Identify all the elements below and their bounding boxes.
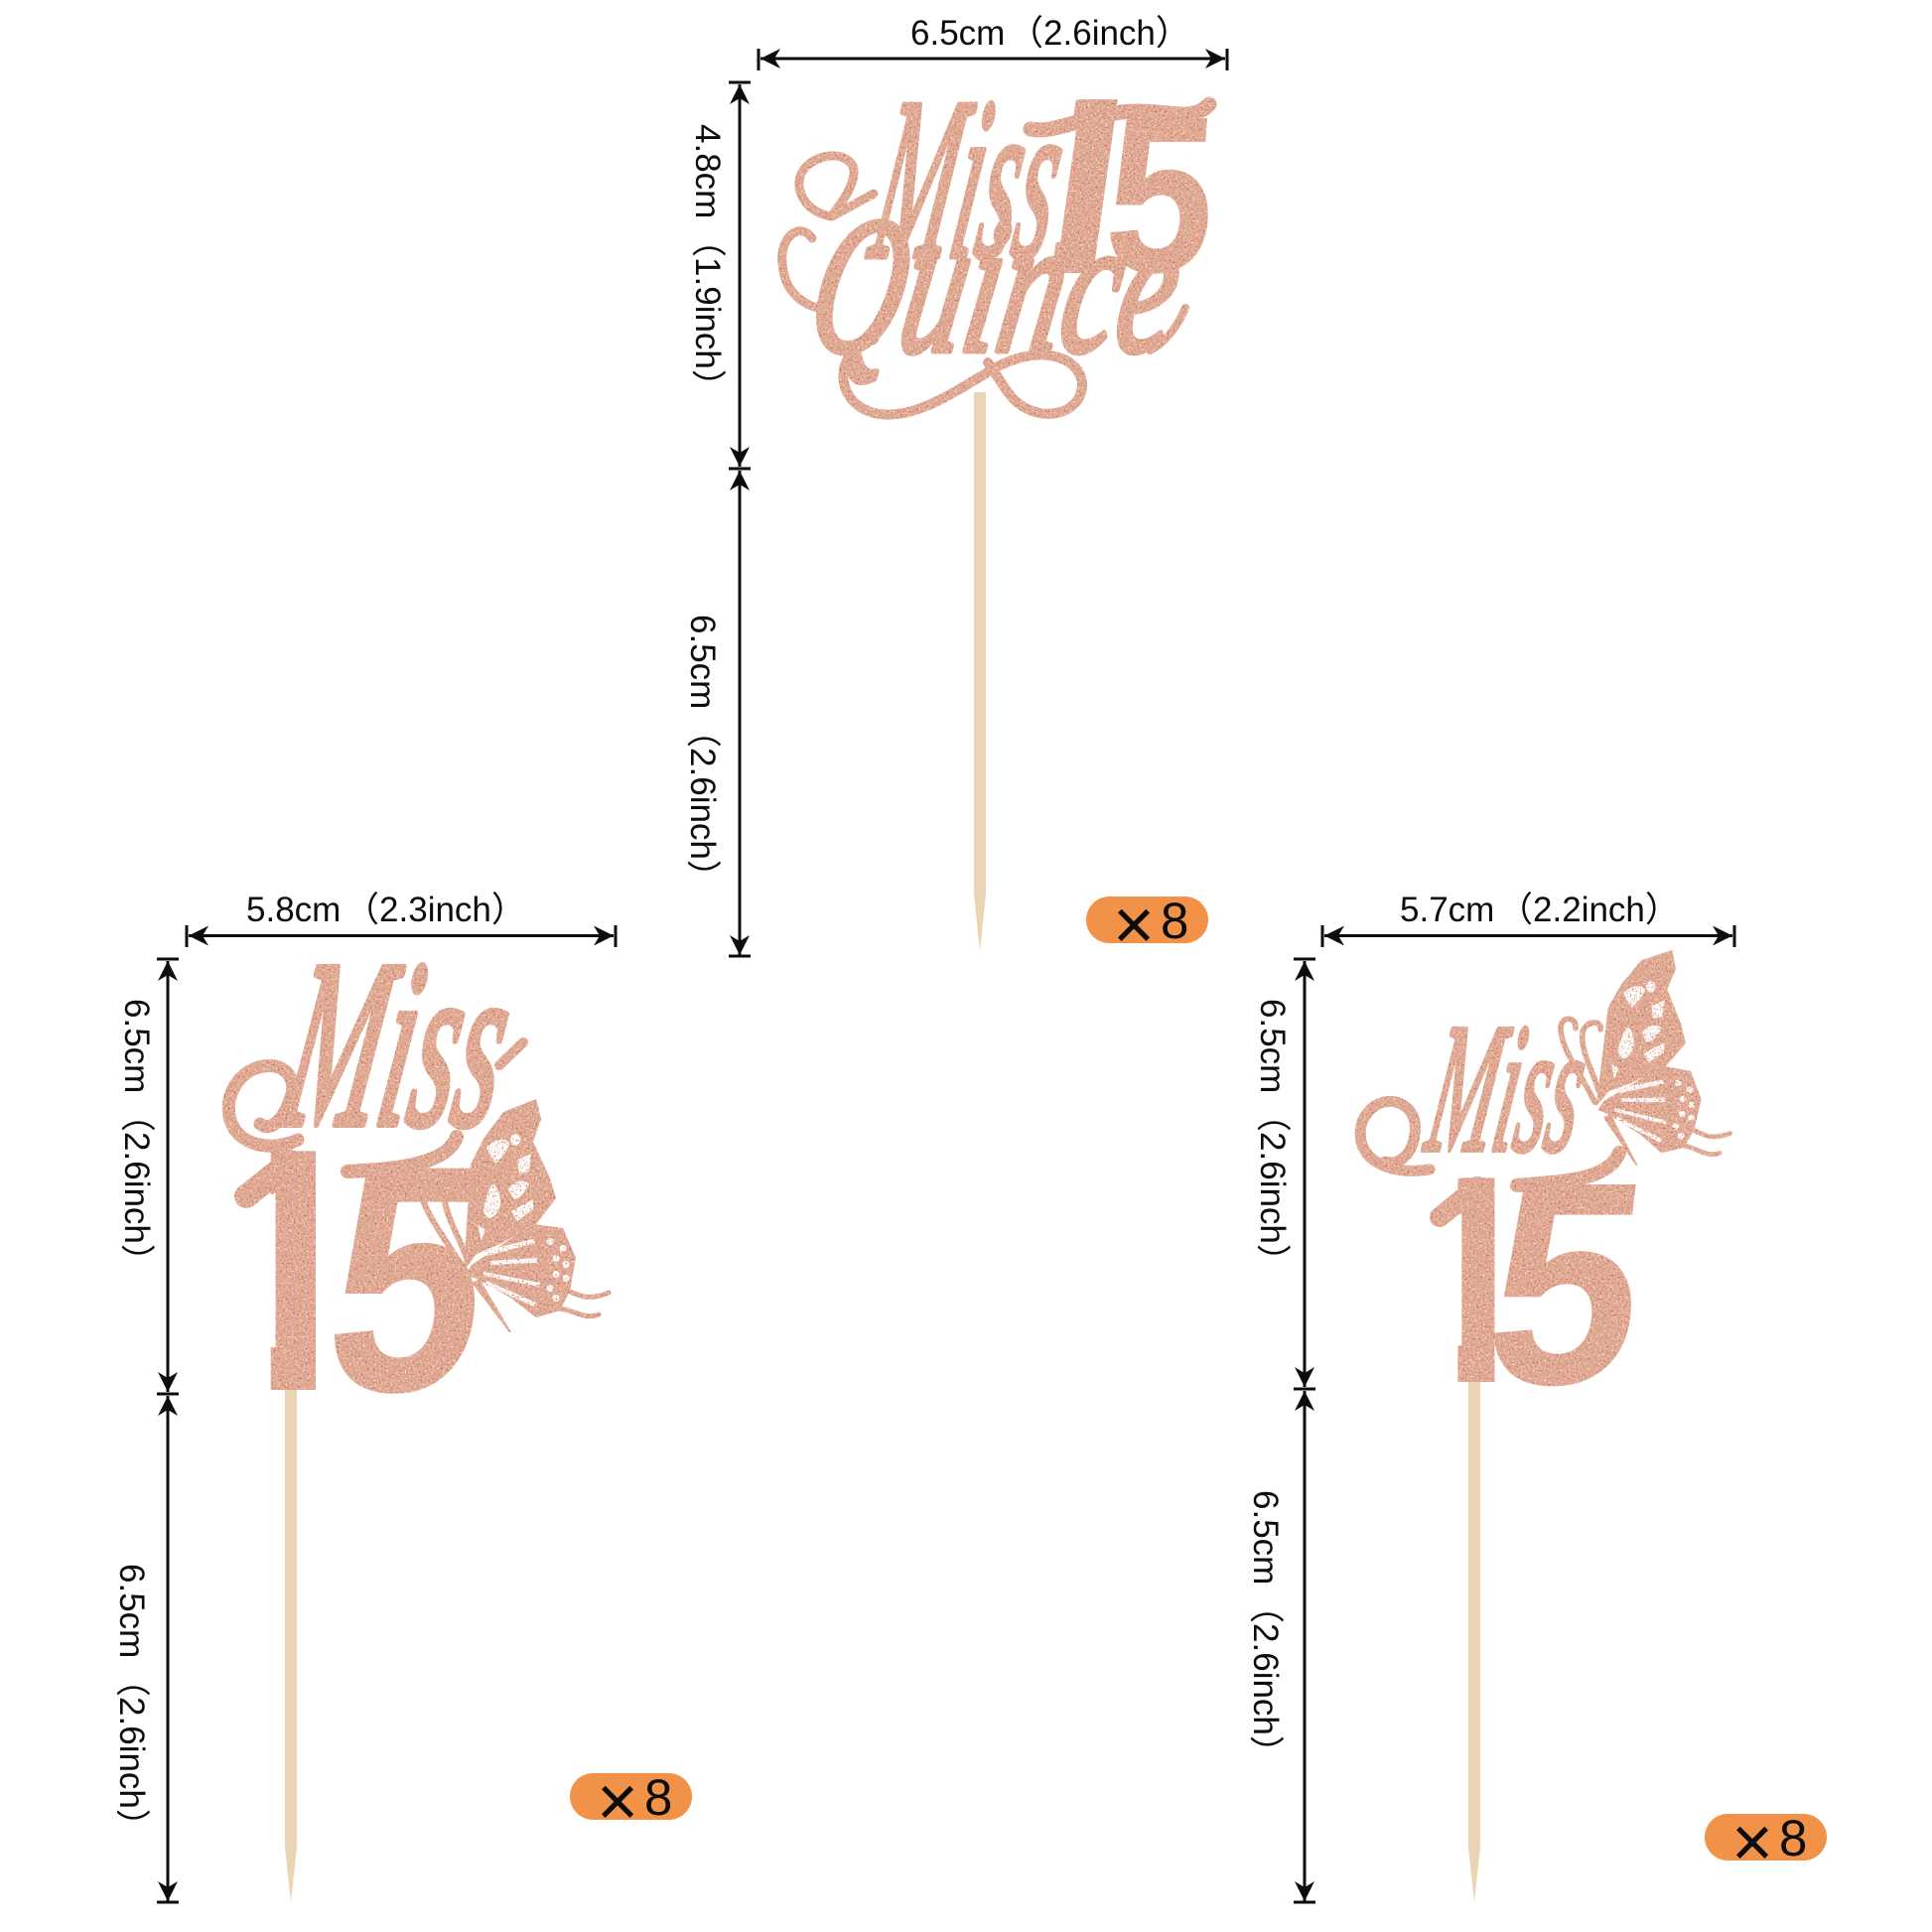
- topper lettering: Miss 15: 5: [312, 1099, 507, 1458]
- wooden stick: [1468, 1380, 1480, 1902]
- width dimension: 5.8cm （2.3inch）: [246, 891, 526, 929]
- wooden stick: [974, 392, 986, 951]
- badge: quantity x8: [1705, 1803, 1827, 1882]
- width dimension: 5.7cm （2.2inch）: [1400, 891, 1680, 929]
- height dimension: topper: [117, 959, 179, 1394]
- height dimension: stick: [112, 1396, 179, 1902]
- topper lettering: Miss 15: 1: [208, 1086, 373, 1467]
- topper lettering: Miss 15: Miss: [267, 912, 529, 1176]
- width dimension: [759, 14, 1227, 70]
- badge: quantity x8: [570, 1762, 692, 1842]
- height dimension: topper: 6.5cm （2.6inch）: [1253, 999, 1292, 1279]
- icon: butterfly: [1554, 944, 1739, 1171]
- height dimension: topper: 6.5cm （2.6inch）: [117, 999, 156, 1279]
- badge: quantity x8: ×: [1113, 886, 1155, 965]
- badge: quantity x8: 8: [1779, 1810, 1807, 1866]
- badge: quantity x8: ×: [1731, 1803, 1773, 1882]
- height dimension: stick: 6.5cm （2.6inch）: [1246, 1490, 1285, 1770]
- topper lettering: Miss 15 Quince: Quince: [796, 178, 1197, 393]
- panel: Miss 15 butterfly topper, right: [1246, 891, 1827, 1902]
- topper lettering: Miss 15 Quince: 1: [986, 52, 1177, 330]
- panel: Miss 15 butterfly topper, left: [112, 891, 692, 1902]
- topper lettering: Miss 15: Miss: [1415, 987, 1600, 1190]
- topper lettering: Miss 15: [222, 962, 612, 1394]
- height dimension: stick: 6.5cm （2.6inch）: [683, 615, 722, 895]
- width dimension: [187, 891, 616, 947]
- topper lettering: Miss 15 Quince: 5: [1099, 72, 1223, 319]
- topper lettering: Miss 15: 5: [1472, 1122, 1661, 1445]
- badge: quantity x8: ×: [597, 1762, 638, 1842]
- height dimension: stick: 6.5cm （2.6inch）: [112, 1564, 151, 1844]
- width dimension: [1322, 891, 1734, 947]
- width dimension: 6.5cm （2.6inch）: [910, 14, 1190, 53]
- topper lettering: Miss 15 Quince: [777, 97, 1217, 420]
- badge: quantity x8: [1086, 886, 1208, 965]
- height dimension: topper: [688, 82, 751, 469]
- wooden stick: [285, 1385, 297, 1902]
- height dimension: topper: 4.8cm （1.9inch）: [688, 124, 727, 404]
- panel: Miss Quince topper: [683, 14, 1227, 965]
- topper lettering: Miss 15 Quince: Miss: [857, 52, 1081, 307]
- badge: quantity x8: 8: [644, 1769, 672, 1826]
- height dimension: stick: [1246, 1391, 1315, 1902]
- topper lettering: Miss 15: 1: [1407, 1123, 1542, 1449]
- badge: quantity x8: 8: [1161, 893, 1188, 949]
- height dimension: topper: [1253, 959, 1315, 1389]
- icon: butterfly: [421, 1099, 609, 1332]
- topper lettering: Miss 15: [1354, 949, 1732, 1386]
- height dimension: stick: [683, 471, 751, 956]
